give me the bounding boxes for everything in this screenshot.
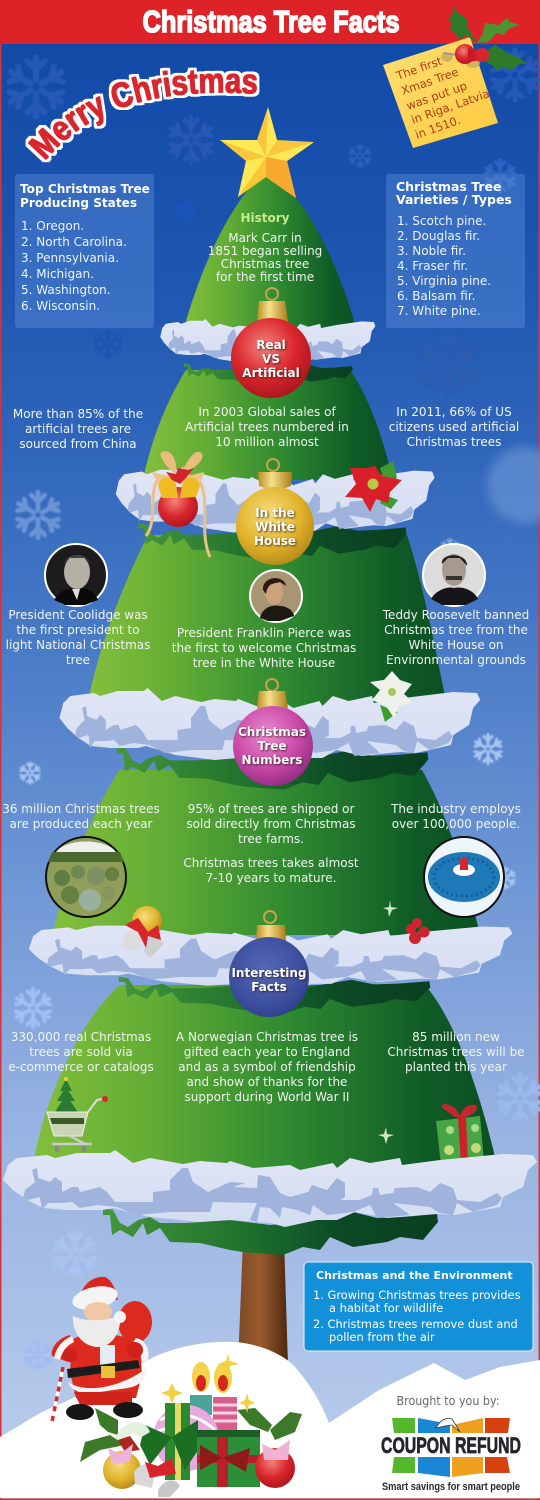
sticky note: [383, 37, 498, 148]
ornament: real vs artificial: Real: [256, 338, 286, 352]
facts: numbers center: sold directly from Christmas: [186, 817, 356, 831]
tree layer 2: [143, 370, 393, 480]
ornament: christmas tree numbers: Tree: [257, 739, 287, 753]
facts: real vs artificial left: [13, 407, 143, 451]
trunk: [238, 1240, 288, 1365]
photo: people crowd: [424, 837, 504, 917]
ornament: interesting facts: [229, 911, 309, 1017]
panel: christmas and the environment: 2. Christmas trees remove dust and: [313, 1317, 518, 1331]
facts: numbers right: [390, 802, 521, 831]
ornament: interesting facts: Interesting: [231, 966, 307, 980]
text: Pierce: tree in the White House: [193, 656, 335, 670]
panel: christmas and the environment: pollen from the air: [329, 1330, 435, 1344]
facts: interesting center: A Norwegian Christmas tree is: [176, 1030, 358, 1044]
tree layer 5: [32, 985, 498, 1170]
logo: coupon refund: [381, 1418, 521, 1493]
text: Pierce: President Franklin Pierce was: [177, 626, 351, 640]
presents pile: [80, 1354, 302, 1497]
sticky note: in Riga, Latvia: [409, 86, 491, 127]
text: Roosevelt: [382, 608, 529, 667]
text: Pierce: the first to welcome Christmas: [172, 641, 356, 655]
ornament: christmas tree numbers: [233, 679, 313, 786]
panel: producing states: [15, 174, 154, 328]
tree layer 1: [182, 172, 358, 335]
snow band 4: [29, 923, 513, 990]
header bar: [0, 0, 540, 44]
history text: for the first time: [216, 270, 314, 284]
facts: real vs artificial left: More than 85% of the: [13, 407, 143, 421]
merry christmas arc text: Merry Christmas: [26, 68, 260, 162]
facts: numbers left: 36 million Christmas trees: [2, 802, 160, 816]
sticky note: The first: [393, 54, 444, 83]
facts: numbers left: are produced each year: [9, 817, 153, 831]
icon: white poinsettia: [370, 671, 413, 722]
text: Coolidge: the first president to: [16, 623, 140, 637]
fringe band 2: [138, 523, 406, 560]
facts: interesting right: 85 million new: [412, 1030, 500, 1044]
panel: producing states: 6. Wisconsin.: [21, 299, 100, 313]
fringe band 1: [184, 363, 353, 385]
text: Roosevelt: Teddy Roosevelt banned: [382, 608, 529, 622]
facts: numbers center: 95% of trees are shipped or: [188, 802, 354, 816]
icon: holly and pin: [441, 5, 527, 71]
sticky note: Xmas Tree: [399, 65, 460, 98]
facts: interesting center: [176, 1030, 358, 1104]
facts: real vs artificial right: Christmas trees: [407, 435, 501, 449]
facts: real vs artificial center: 10 million almost: [215, 435, 319, 449]
facts: interesting right: Christmas trees will be: [387, 1045, 525, 1059]
ornament: in the white house: House: [254, 534, 296, 548]
ornament: interesting facts: Facts: [251, 980, 287, 994]
text: Roosevelt: White House on: [408, 638, 504, 652]
portrait: Pierce: [250, 570, 302, 622]
panel: producing states: 5. Washington.: [21, 283, 111, 297]
facts: interesting center: and show of thanks for the: [187, 1075, 347, 1089]
facts: interesting center: and as a symbol of friendship: [178, 1060, 356, 1074]
santa: [52, 1277, 152, 1422]
facts: real vs artificial center: In 2003 Global sales of: [198, 405, 336, 419]
facts: interesting left: e-commerce or catalogs: [8, 1060, 154, 1074]
facts: interesting right: planted this year: [405, 1060, 507, 1074]
ornament: in the white house: White: [255, 520, 295, 534]
panel: christmas and the environment: Christmas and the Environment: [316, 1269, 513, 1282]
panel: varieties: Varieties / Types: [396, 192, 512, 207]
panel: varieties: 6. Balsam fir.: [397, 289, 476, 303]
sticky note: was put up: [404, 78, 469, 113]
facts: interesting right: [387, 1030, 525, 1074]
facts: real vs artificial center: Artificial trees numbered in: [185, 420, 349, 434]
panel: christmas and the environment: [304, 1262, 533, 1351]
facts: numbers right: The industry employs: [390, 802, 521, 816]
sparkle: [378, 1127, 394, 1144]
text: Roosevelt: Environmental grounds: [386, 653, 526, 667]
panel: producing states: Producing States: [20, 196, 137, 210]
snow band 5: [3, 1150, 537, 1227]
panel: varieties: [386, 174, 525, 328]
facts: real vs artificial right: [389, 405, 519, 449]
title: Christmas Tree Facts: [142, 4, 400, 39]
facts: numbers center: Christmas trees takes almost: [183, 856, 359, 870]
panel: producing states: 3. Pennsylvania.: [21, 251, 119, 265]
facts: real vs artificial right: citizens used artificial: [389, 420, 519, 434]
facts: real vs artificial center: [185, 405, 349, 449]
brought to you by: Brought to you by:: [396, 1394, 500, 1408]
facts: real vs artificial right: In 2011, 66% of US: [396, 405, 512, 419]
history text: [208, 211, 322, 284]
panel: varieties: Christmas Tree: [396, 179, 501, 194]
panel: varieties: 3. Noble fir.: [397, 244, 466, 258]
photo: tree farm: [46, 837, 126, 917]
history text: Mark Carr in: [228, 231, 302, 245]
text: Coolidge: [6, 608, 150, 667]
ornament: real vs artificial: VS: [262, 352, 280, 366]
cart icon on tree: [47, 1077, 108, 1152]
ornament: in the white house: [236, 459, 314, 565]
ornament: real vs artificial: [231, 288, 311, 398]
panel: producing states: Top Christmas Tree: [20, 182, 150, 196]
facts: numbers right: over 100,000 people.: [392, 817, 520, 831]
snow band 2: [116, 467, 435, 537]
history text: History: [240, 211, 290, 225]
ornament: christmas tree numbers: Christmas: [238, 725, 306, 739]
star: [220, 107, 314, 198]
panel: varieties: 1. Scotch pine.: [397, 214, 486, 228]
portrait: Coolidge: [45, 544, 107, 606]
history text: 1851 began selling: [208, 244, 322, 258]
icon: poinsettia: [345, 461, 402, 512]
panel: varieties: 2. Douglas fir.: [397, 229, 480, 243]
fringe band 4: [119, 977, 430, 1013]
facts: real vs artificial left: sourced from China: [19, 437, 137, 451]
panel: producing states: 1. Oregon.: [21, 219, 84, 233]
fringe band 3: [117, 747, 428, 790]
text: Pierce: [172, 626, 356, 670]
panel: varieties: 7. White pine.: [397, 304, 481, 318]
icon: red berries: [406, 918, 430, 944]
snow band 3: [59, 688, 480, 765]
text: Coolidge: President Coolidge was: [8, 608, 148, 622]
text: Roosevelt: Christmas tree from the: [384, 623, 528, 637]
panel: varieties: 5. Virginia pine.: [397, 274, 491, 288]
tree layer 4: [53, 770, 480, 935]
panel: varieties: 4. Fraser fir.: [397, 259, 468, 273]
snow hills: [0, 1342, 540, 1498]
panel: christmas and the environment: a habitat for wildlife: [329, 1301, 443, 1315]
sticky note: in 1510.: [413, 113, 462, 142]
facts: interesting left: trees are sold via: [29, 1045, 133, 1059]
fringe band 5: [103, 1208, 438, 1255]
tree layer 3: [86, 535, 448, 710]
portrait: Roosevelt: [423, 544, 485, 606]
facts: interesting center: gifted each year to England: [184, 1045, 350, 1059]
sparkle: [383, 900, 398, 917]
facts: interesting left: [8, 1030, 154, 1074]
ornament: in the white house: In the: [255, 506, 295, 520]
icon: bells and red ball: [146, 451, 210, 557]
history text: Christmas tree: [221, 257, 309, 271]
facts: numbers center: 7-10 years to mature.: [206, 871, 336, 885]
icon: silver bells and gold ball: [120, 906, 164, 958]
panel: christmas and the environment: 1. Growing Christmas trees provides: [313, 1288, 521, 1302]
panel: producing states: 4. Michigan.: [21, 267, 94, 281]
facts: numbers center: [183, 802, 359, 885]
ornament: real vs artificial: Artificial: [242, 366, 300, 380]
text: Coolidge: tree: [66, 653, 90, 667]
facts: interesting center: support during World War II: [185, 1090, 349, 1104]
facts: interesting left: 330,000 real Christmas: [11, 1030, 151, 1044]
panel: producing states: 2. North Carolina.: [21, 235, 127, 249]
facts: numbers left: [2, 802, 160, 831]
icon: gift box: [436, 1104, 484, 1165]
text: Coolidge: light National Christmas: [6, 638, 150, 652]
snow band 1: [160, 319, 375, 365]
facts: real vs artificial left: artificial trees are: [25, 422, 131, 436]
facts: numbers center: tree farms.: [238, 832, 304, 846]
ornament: christmas tree numbers: Numbers: [242, 753, 302, 767]
